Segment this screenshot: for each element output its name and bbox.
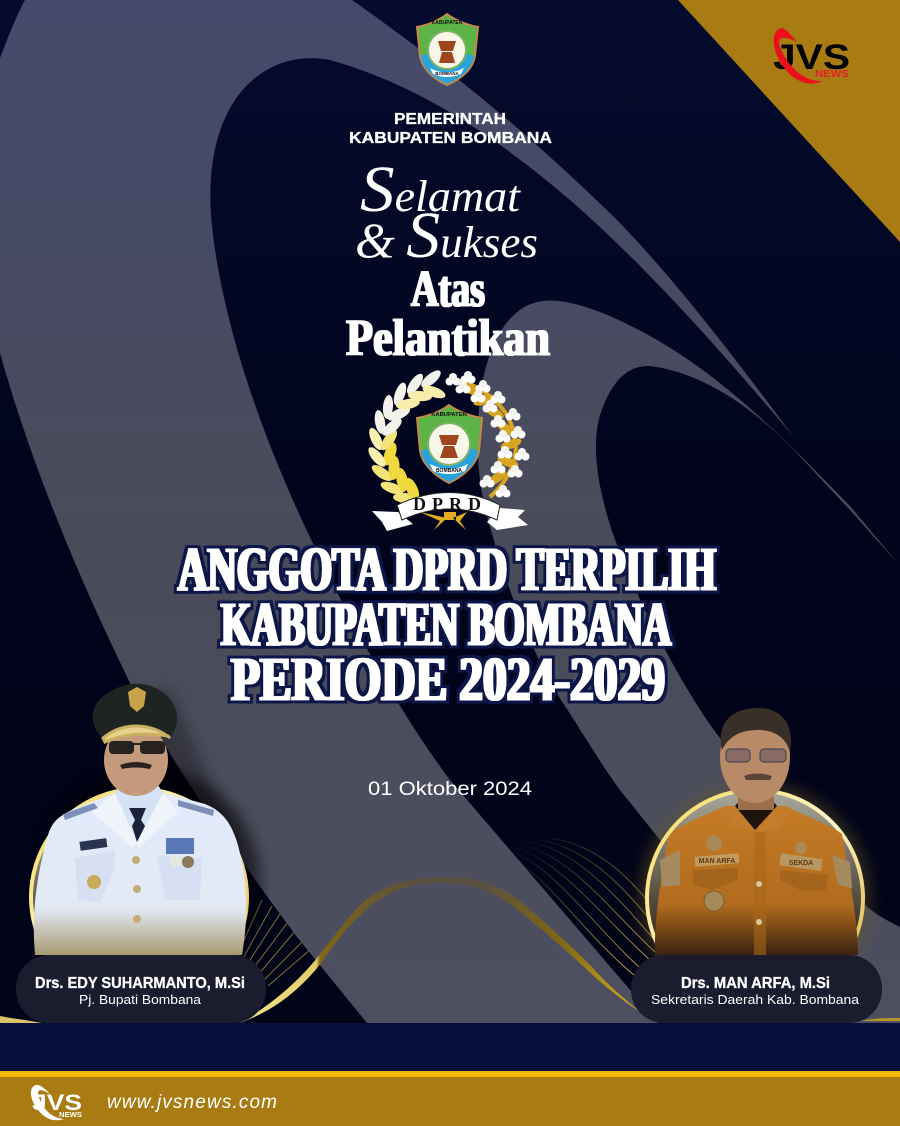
head xyxy=(104,724,168,796)
JVS logo top right xyxy=(773,28,850,84)
main title: PERIODE 2024-2029 xyxy=(231,646,665,714)
script greeting: Selamat xyxy=(360,153,522,226)
gold corner triangle xyxy=(678,0,900,242)
heading: government name: KABUPATEN BOMBANA xyxy=(349,130,552,147)
name pill: Edy Suharmanto xyxy=(16,955,266,1023)
portrait: Man Arfa xyxy=(638,708,872,1015)
website: www.jvsnews.com xyxy=(107,1092,277,1113)
gold stripe xyxy=(0,1071,900,1077)
cap xyxy=(93,684,177,738)
main title xyxy=(178,536,716,714)
JVS logo footer: JVS xyxy=(32,1090,82,1115)
portrait: Man Arfa: MAN ARFA xyxy=(699,858,735,865)
uniform xyxy=(655,806,858,955)
portrait: Edy Suharmanto xyxy=(31,684,260,1005)
name pill: Edy Suharmanto: Pj. Bupati Bombana xyxy=(79,993,201,1007)
JVS logo footer xyxy=(31,1085,82,1120)
script greeting xyxy=(355,153,538,272)
crest: Kabupaten Bombana centre: KABUPATEN xyxy=(431,412,467,418)
portrait: Man Arfa: SEKDA xyxy=(789,860,813,867)
heading: government name xyxy=(349,111,552,147)
JVS logo top right: NEWS xyxy=(815,69,849,80)
gold wave right end xyxy=(860,1018,900,1021)
heading: Atas Pelantikan: Pelantikan xyxy=(346,310,550,367)
crest: Kabupaten Bombana centre xyxy=(417,405,482,483)
name pill: Man Arfa xyxy=(631,955,882,1023)
navy band xyxy=(0,1023,900,1071)
name pill: Edy Suharmanto: Drs. EDY SUHARMANTO, M.Si xyxy=(35,975,245,992)
heading: Atas Pelantikan: Atas xyxy=(411,261,485,318)
crest: Kabupaten Bombana centre: BOMBANA xyxy=(436,468,462,474)
gold wave xyxy=(0,877,640,1023)
cotton branch xyxy=(446,371,530,498)
fine gold lines: right group xyxy=(510,838,662,976)
swoosh: second gray band xyxy=(478,301,900,1023)
ribbon xyxy=(372,492,528,531)
wheat wreath xyxy=(365,367,447,504)
ribbon: DPRD xyxy=(413,494,487,514)
JVS logo top right: JVS xyxy=(773,38,850,77)
DPRD emblem xyxy=(365,367,530,531)
date: 01 Oktober 2024 xyxy=(368,779,532,800)
crest: Kabupaten Bombana top: BOMBANA xyxy=(435,71,459,76)
name pill: Man Arfa: Drs. MAN ARFA, M.Si xyxy=(681,975,830,992)
crest: Kabupaten Bombana top xyxy=(417,14,478,85)
crest: Kabupaten Bombana top: KABUPATEN xyxy=(432,20,463,26)
JVS logo footer: NEWS xyxy=(59,1112,82,1119)
heading: Atas Pelantikan xyxy=(346,261,550,367)
uniform xyxy=(34,793,246,955)
heading: government name: PEMERINTAH xyxy=(394,111,506,128)
footer band xyxy=(0,1077,900,1126)
fine gold lines: left group xyxy=(236,900,312,986)
gold wave left end xyxy=(0,1016,42,1023)
script greeting: & Sukses xyxy=(355,199,538,272)
name pill: Man Arfa: Sekretaris Daerah Kab. Bombana xyxy=(651,993,859,1007)
head xyxy=(738,785,774,810)
